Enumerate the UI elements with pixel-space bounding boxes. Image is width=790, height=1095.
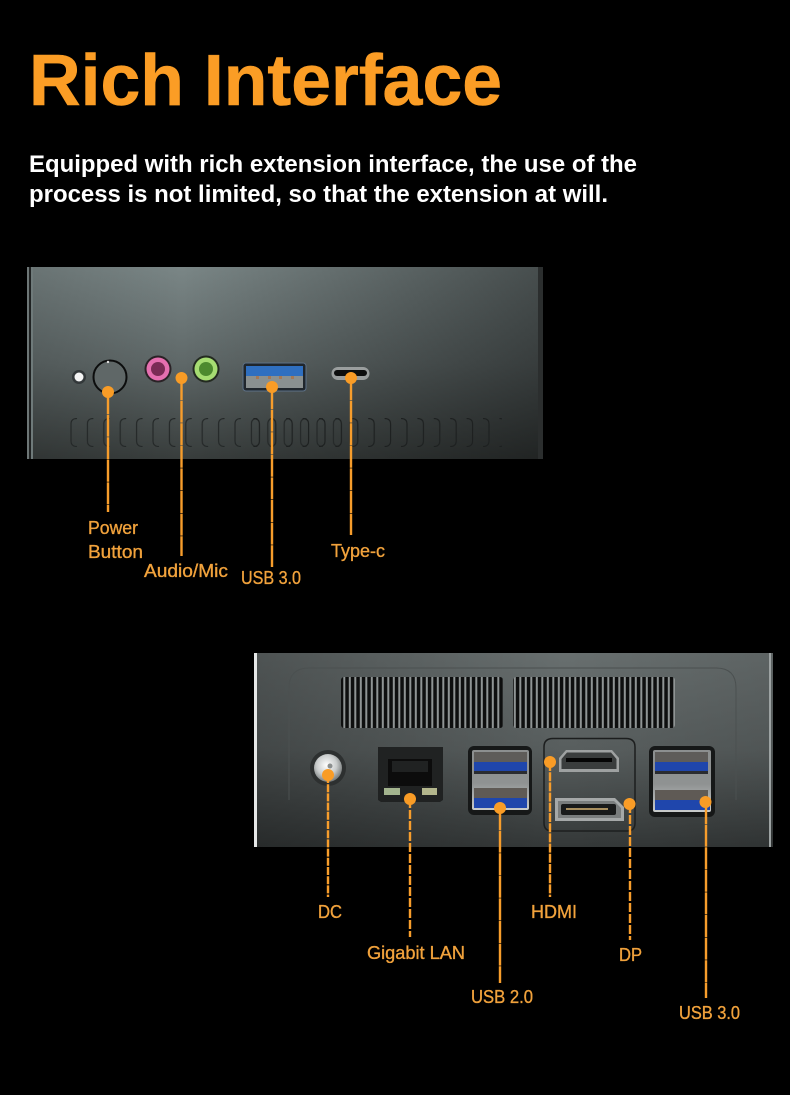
callout: DP <box>619 798 642 965</box>
callout: Type-c <box>331 372 385 561</box>
icon: HDMI port <box>559 750 619 772</box>
vent grille right <box>513 677 675 728</box>
intro text: Equipped with rich extension interface, the use of the <box>29 151 637 178</box>
icon: power button <box>94 360 126 394</box>
vent grille left <box>341 677 503 728</box>
callout: USB 3.0 rear: USB 3.0 <box>679 1002 740 1023</box>
panel: rear of mini PC <box>254 653 773 847</box>
icon: DC jack <box>310 750 346 786</box>
callout: Power Button: Power <box>88 517 138 538</box>
callout: USB 3.0 front <box>241 381 301 588</box>
rear panel body <box>254 653 773 847</box>
callout: Type-c: Type-c <box>331 540 385 561</box>
front panel body <box>27 267 543 459</box>
icon: audio jack pink <box>144 356 172 382</box>
callout: DC: DC <box>318 901 342 922</box>
title: Rich Interface <box>29 41 502 121</box>
callout: DP: DP <box>619 944 642 965</box>
callout: HDMI: HDMI <box>531 901 577 922</box>
callout: Gigabit LAN: Gigabit LAN <box>367 942 465 963</box>
intro text <box>29 151 637 208</box>
panel: front of mini PC <box>27 267 543 459</box>
callout: USB 2.0: USB 2.0 <box>471 986 533 1007</box>
callout: DC <box>318 769 342 922</box>
icon: audio jack green <box>192 356 220 382</box>
callout: USB 3.0 front: USB 3.0 <box>241 567 301 588</box>
icon: USB 3.0 double port <box>649 746 715 817</box>
icon: USB 3.0 port <box>243 363 306 391</box>
callout: Audio/Mic <box>144 372 228 581</box>
callout: HDMI <box>531 756 577 922</box>
callout: USB 2.0 <box>471 802 533 1007</box>
callout: USB 3.0 rear <box>679 796 740 1023</box>
intro text: process is not limited, so that the extension at will. <box>29 181 608 208</box>
HDMI and DP housing <box>544 738 635 831</box>
icon: LED <box>72 370 86 384</box>
callout: Audio/Mic: Audio/Mic <box>144 560 228 581</box>
callout: Power Button: Button <box>88 541 143 562</box>
icon: LAN port <box>378 747 443 802</box>
icon: DP port <box>555 798 624 821</box>
icon: Type-c port <box>332 367 370 380</box>
icon: USB 2.0 double port <box>468 746 532 815</box>
callout: Power Button <box>88 386 143 562</box>
callout: Gigabit LAN <box>367 793 465 963</box>
